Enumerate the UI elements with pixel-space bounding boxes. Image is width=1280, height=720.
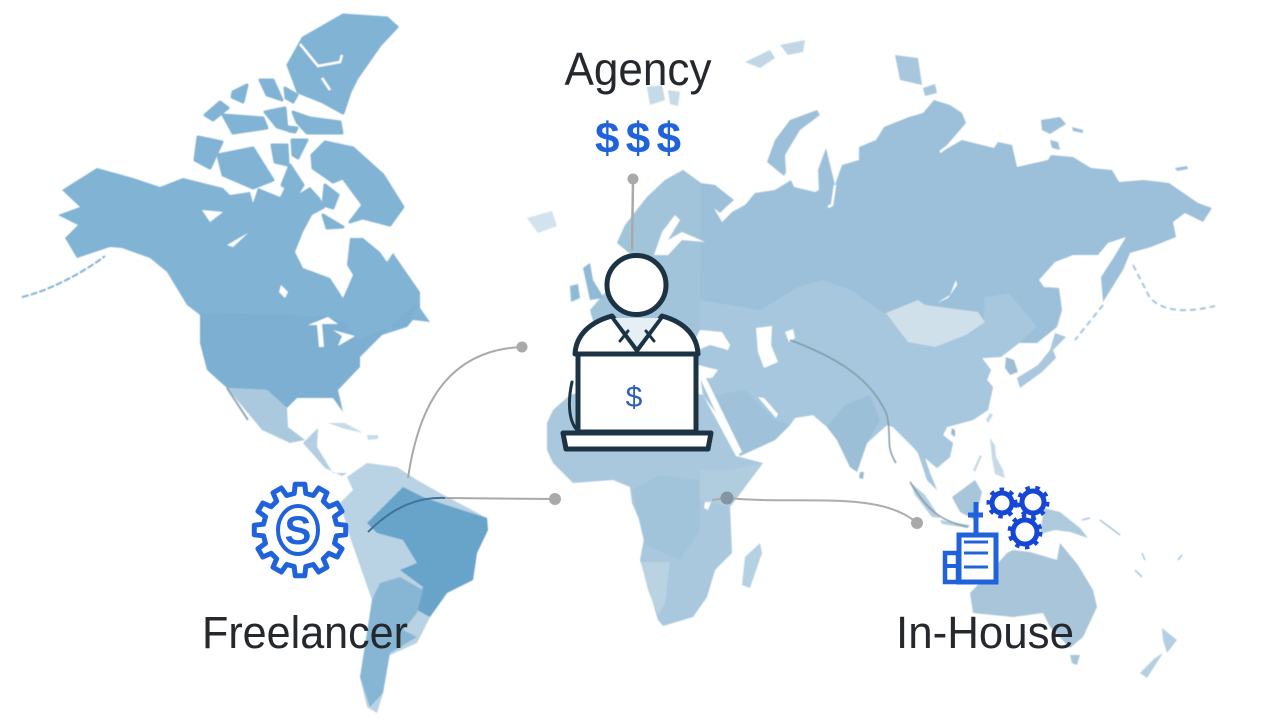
map: Aleutian chain: [22, 256, 105, 297]
map: dark route across Asia: [790, 340, 896, 463]
icon: office building: [945, 502, 996, 582]
map: arctic islands: [195, 15, 403, 228]
map: Scandinavia pale north: [647, 85, 680, 106]
icon: three dollar signs: $$$: [595, 114, 681, 163]
person head: [607, 256, 666, 314]
laptop screen: [578, 354, 696, 432]
map: United States: [200, 303, 417, 412]
connector: In-House: [712, 492, 923, 529]
map: British Isles: [570, 263, 604, 302]
map: Gulf of Ob: [828, 137, 960, 207]
map: Great Lakes: [308, 317, 355, 347]
map: Franz Josef and Severnaya Zemlya: [895, 55, 937, 96]
map: Canadian lakes: [202, 210, 288, 298]
map: Central Africa: [632, 475, 700, 560]
map: New Guinea: [1040, 508, 1088, 538]
map: South America: [340, 463, 488, 713]
map: Korea: [1005, 357, 1018, 375]
map: Japan: [1017, 333, 1066, 388]
map: Mongolia: [886, 300, 985, 347]
label: In-House: In-House: [896, 607, 1074, 658]
map: Central America: [303, 428, 347, 476]
map: Baltic Sea: [654, 215, 705, 255]
map: New Siberian Islands: [1041, 117, 1083, 150]
map: Brazil: [367, 487, 488, 617]
map: Caribbean: [328, 423, 378, 440]
map: Australia: [970, 543, 1097, 648]
label: Freelancer: Freelancer: [202, 607, 408, 658]
map: Europe: [590, 170, 701, 380]
map: Arabia: [716, 390, 790, 456]
laptop base: [563, 433, 711, 449]
map: dark route across Indonesia: [910, 482, 968, 527]
icon: person at laptop: [563, 256, 711, 449]
icon: gear with S: S: [285, 509, 311, 553]
connector: Freelancer to center: [368, 342, 561, 532]
person body: [575, 316, 698, 354]
map: Namibia and west coast: [641, 562, 670, 615]
map: Borneo: [952, 480, 982, 520]
map: White Sea: [714, 208, 732, 222]
map: Africa: [547, 385, 763, 626]
map: Wrangel Island: [1175, 166, 1188, 171]
map: Philippines and Taiwan: [973, 413, 1005, 478]
map: Caspian and Aral: [756, 326, 795, 368]
map: southern Asia: [700, 280, 1037, 490]
map: Sri Lanka and Hainan: [859, 428, 955, 479]
map: Ellesmere fjords: [300, 44, 342, 90]
map: Horn of Africa: [700, 463, 763, 507]
map: Novaya Zemlya: [767, 110, 820, 176]
map: Sea of Azov to Mediterranean gap: [698, 365, 718, 378]
map: Madagascar: [742, 543, 762, 588]
map: New Zealand: [1140, 628, 1177, 678]
map: Iceland: [527, 211, 557, 233]
map: Black Sea: [694, 330, 730, 350]
map: Eurasia: [590, 100, 1212, 490]
map: Baikal: [937, 280, 957, 303]
connector: Agency: [628, 174, 638, 250]
map: Sumatra and Java: [910, 482, 970, 528]
label: Agency: Agency: [564, 43, 712, 95]
map: Red Sea: [700, 378, 742, 456]
icon: gear with S: [254, 484, 346, 576]
map: Svalbard: [745, 40, 805, 68]
collar area: [615, 318, 659, 347]
map: Persian Gulf: [758, 397, 778, 418]
icon: cogs: [990, 489, 1046, 546]
map: Lake Victoria: [704, 502, 711, 510]
map: Kuril chain: [1075, 265, 1215, 340]
map: India: [827, 395, 880, 472]
map: Tasmania: [1070, 655, 1080, 665]
map: dark route across Mexico: [227, 388, 248, 420]
icon: laptop dollar: $: [626, 381, 643, 414]
map: Alaska and Canada: [58, 168, 430, 345]
map: Argentina and Paraguay: [360, 577, 423, 707]
map: Mexico: [227, 388, 305, 443]
map: Pacific islands: [1082, 518, 1182, 577]
